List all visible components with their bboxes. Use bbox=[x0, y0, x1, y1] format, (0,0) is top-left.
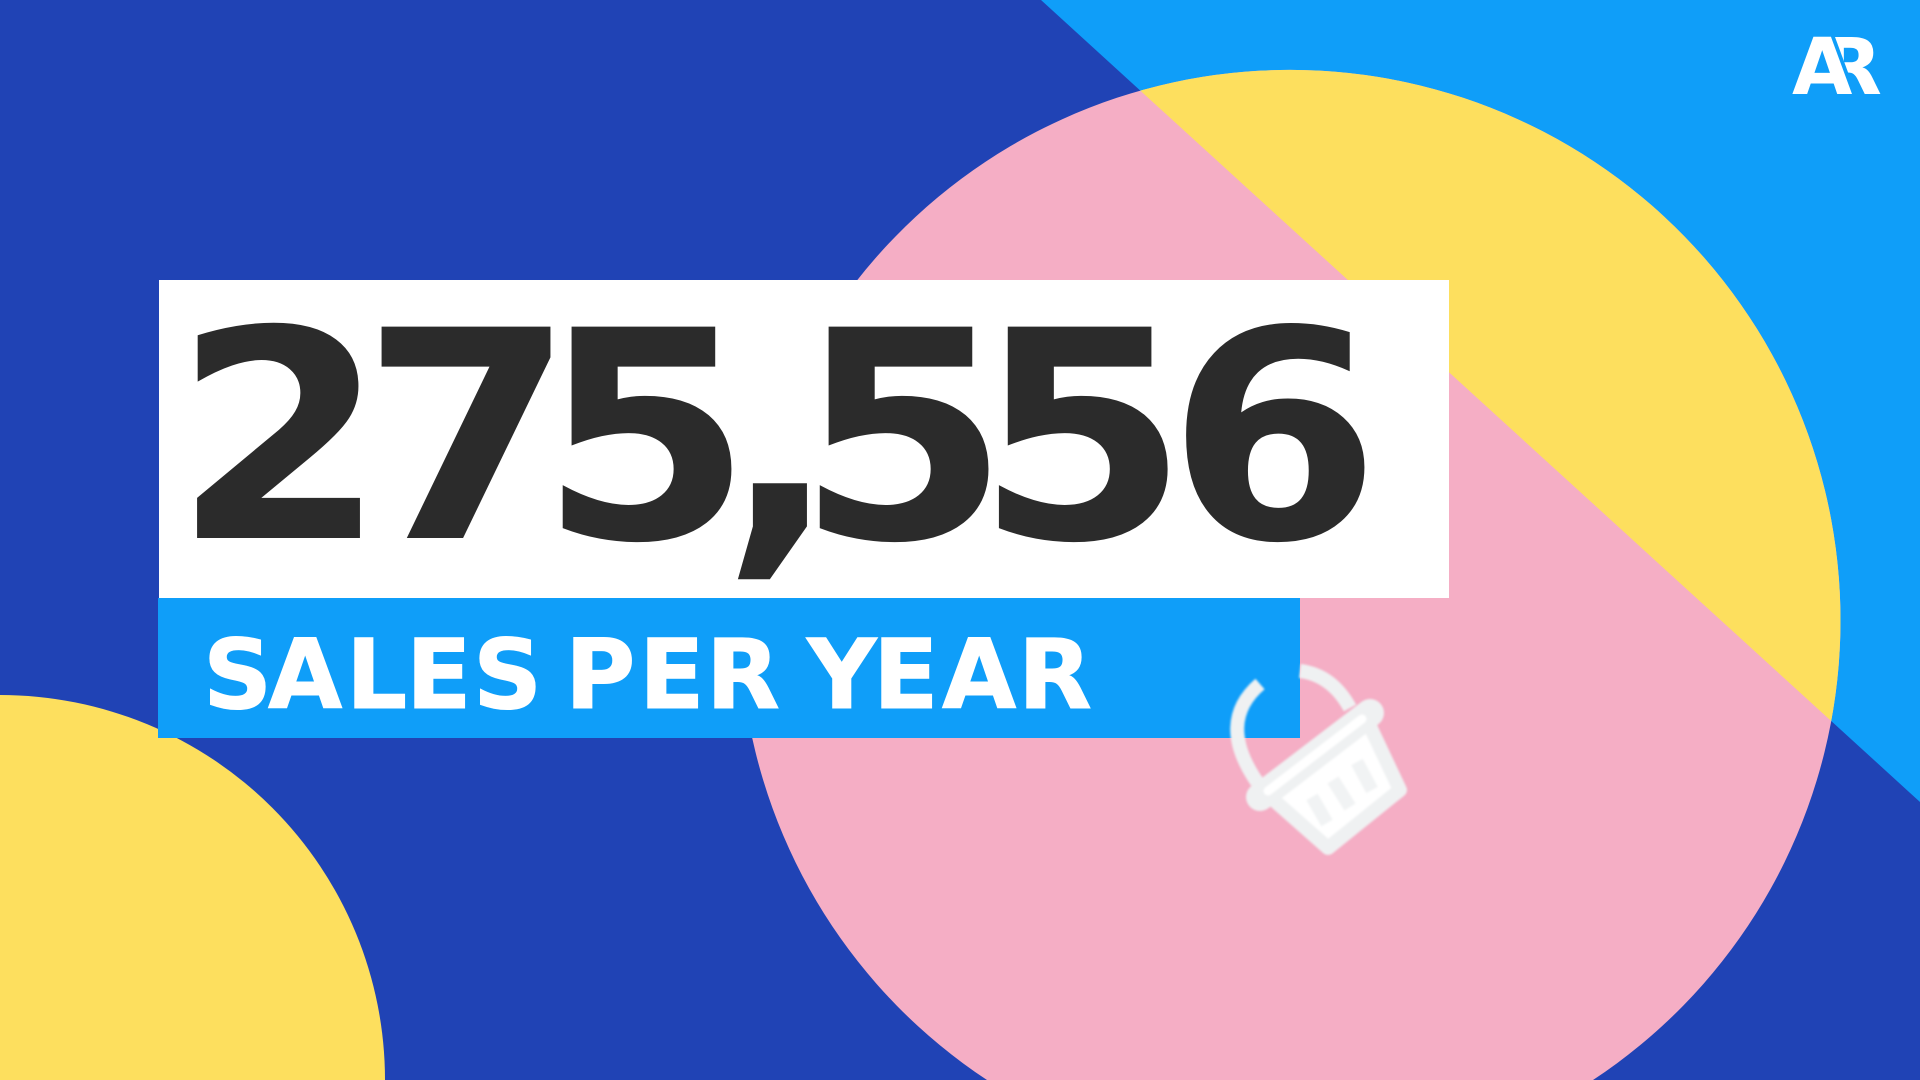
logo: AR: A bbox=[1792, 23, 1852, 113]
big number: 275,556 bbox=[173, 270, 1381, 607]
background: light blue triangle bbox=[1041, 0, 1920, 802]
label: sales per year: SALES PER YEAR bbox=[203, 619, 1092, 731]
yellow segment of large circle bbox=[1140, 70, 1840, 721]
yellow quarter circle bottom left bbox=[0, 695, 385, 1080]
logo: AR: R bbox=[1822, 23, 1882, 113]
logo: AR bbox=[1792, 36, 1880, 94]
icon: shopping basket bbox=[1237, 671, 1400, 848]
white number panel bbox=[159, 280, 1449, 598]
large pink circle bbox=[740, 70, 1841, 1080]
blue label bar bbox=[158, 598, 1300, 738]
